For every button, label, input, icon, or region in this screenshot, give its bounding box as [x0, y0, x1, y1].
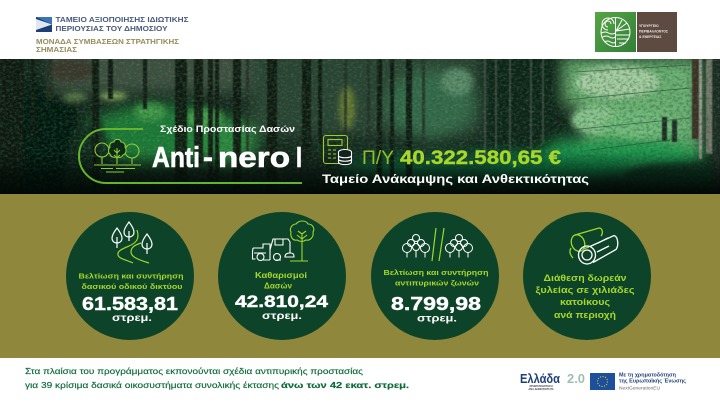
icon: fund logo mark [36, 17, 52, 32]
label: Καθαρισμοί [255, 271, 307, 280]
icon: two tree groups with firebreak [402, 228, 472, 261]
header: fund logo [36, 15, 189, 54]
soft light and foliage areas [24, 59, 712, 183]
unit: στρεμ. [262, 310, 302, 322]
foliage branches [565, 65, 690, 150]
tree trunks [0, 59, 720, 194]
label: ξυλείας σε χιλιάδες [536, 285, 635, 295]
label: ανά περιοχή [554, 310, 616, 320]
label: Δασών [264, 282, 292, 290]
panel: free firewood [523, 212, 651, 340]
value: 8.799,98 [391, 294, 481, 314]
olive panel [0, 194, 720, 358]
icon: trees [95, 139, 139, 164]
logo: Greece 2.0 [520, 372, 585, 391]
funding source: Ταμείο Ανάκαμψης και Ανθεκτικότητας [322, 172, 589, 186]
subtitle: Σχέδιο Προστασίας Δασών [160, 123, 295, 134]
title block [79, 123, 302, 183]
forest photo band [0, 50, 720, 200]
label: δασικού οδικού δικτύου [82, 282, 183, 291]
logo: Greece 2.0: 2.0 [567, 372, 585, 386]
unit name: ΜΟΝΑΔΑ ΣΥΜΒΑΣΕΩΝ ΣΤΡΑΤΗΓΙΚΗΣ [36, 37, 180, 46]
icon: logs [569, 228, 618, 264]
logo: EU funding [590, 372, 686, 392]
title: nero [218, 142, 290, 174]
icon: EU stars [598, 376, 608, 386]
footer note: για 39 κρίσιμα δασικά οικοσυστήματα συνολικής έκτασης [25, 381, 279, 390]
panel: firebreak zones [371, 212, 499, 340]
ministry logo [595, 12, 677, 52]
panel: forest roads [66, 212, 194, 340]
title: I [296, 142, 302, 174]
label: αντιπυρικών ζωνών [395, 278, 479, 288]
fund name: ΠΕΡΙΟΥΣΙΑΣ ΤΟΥ ΔΗΜΟΣΙΟΥ [56, 24, 168, 33]
logo: Greece 2.0: ΑΝΑ ΔΗΜΟΣΙΟΤΗΤΑ [528, 387, 554, 391]
logo: Greece 2.0: ΧΡΗΜΑΤΟΔΟΤΗΣΗ [529, 384, 553, 388]
title: - [203, 142, 213, 174]
panel: forest clearing [218, 212, 346, 340]
budget block [322, 136, 589, 186]
unit: στρεμ. [112, 312, 152, 324]
foliage texture [0, 59, 720, 194]
budget amount: Π/Υ [362, 147, 394, 169]
label: Βελτίωση και συντήρηση [384, 268, 489, 277]
ministry name: & ΕΝΕΡΓΕΙΑΣ [639, 35, 661, 39]
logo: EU funding: της Ευρωπαϊκής Ένωσης [619, 378, 686, 384]
ministry name: ΠΕΡΙΒΑΛΛΟΝΤΟΣ [639, 30, 668, 34]
label: Βελτίωση και συντήρηση [78, 272, 184, 280]
logo: EU funding: Με τη χρηματοδότηση [619, 372, 676, 378]
logo: Greece 2.0: Ελλάδα [520, 372, 560, 386]
title: Anti [152, 142, 200, 174]
ministry name: ΥΠΟΥΡΓΕΙΟ [639, 24, 659, 28]
icon: forestry machine and tree [252, 221, 314, 261]
icon: road and trees [112, 222, 152, 263]
icon: ministry emblem [601, 18, 630, 46]
icon: calculator and coins [324, 136, 352, 165]
icon: ground lines [94, 165, 141, 172]
value: 42.810,24 [235, 292, 329, 311]
unit name: ΣΗΜΑΣΙΑΣ [36, 45, 78, 54]
label: κατοίκους [560, 297, 611, 307]
fund name: ΤΑΜΕΙΟ ΑΞΙΟΠΟΙΗΣΗΣ ΙΔΙΩΤΙΚΗΣ [56, 15, 189, 24]
logo: EU funding: NextGenerationEU [619, 386, 661, 392]
footer note: άνω των 42 εκατ. στρεμ. [281, 381, 409, 390]
label: Διάθεση δωρεάν [544, 273, 627, 283]
budget amount: 40.322.580,65 € [400, 147, 561, 169]
footer note: Στα πλαίσια του προγράμματος εκπονούνται σχέδια αντιπυρικής προστασίας [25, 367, 363, 376]
value: 61.583,81 [82, 294, 178, 314]
unit: στρεμ. [417, 312, 457, 324]
title bracket [79, 129, 302, 183]
